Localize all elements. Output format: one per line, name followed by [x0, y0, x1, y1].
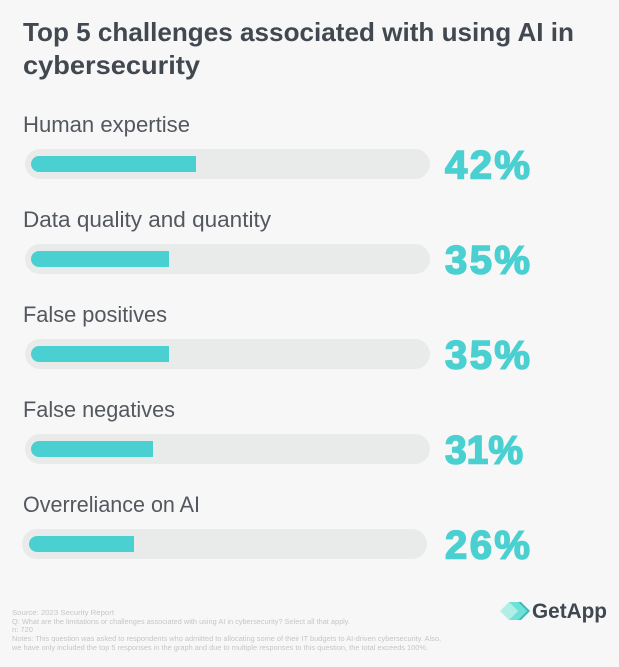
title: Top 5 challenges associated with using AI in [23, 17, 574, 47]
row: Data quality and quantity 35%: 35% [445, 238, 530, 282]
row: Overreliance on AI 26% [22, 492, 530, 568]
row: False negatives 31%: False negatives [23, 397, 175, 422]
row: False positives 35%: False positives [23, 302, 167, 327]
row: False positives 35%: 35% [445, 334, 530, 378]
footnotes: we have only included the top 5 responses in the graph and due to multiple responses to this question, the total exceeds 100%. [11, 645, 428, 652]
footnotes: Notes: This question was asked to respondents who admitted to allocating some of their IT budgets to AI-driven cybersecurity. Also, [12, 636, 441, 643]
row: Data quality and quantity 35%: Data quality and quantity [23, 207, 271, 232]
row: False negatives 31%: 31% [445, 428, 523, 472]
row: Overreliance on AI 26%: Overreliance on AI [23, 492, 200, 517]
row: False positives 35% [23, 302, 530, 378]
title: cybersecurity [23, 50, 201, 80]
title [23, 17, 574, 80]
icon: GetApp diamonds [500, 602, 530, 620]
logo: GetApp: GetApp [532, 600, 607, 623]
row: Data quality and quantity 35% [23, 207, 530, 282]
row: False negatives 31% [23, 397, 523, 472]
logo: GetApp [500, 600, 607, 623]
footnotes: Q: What are the limitations or challenges associated with using AI in cybersecurity? Select all that apply. [12, 619, 350, 626]
footnotes: n: 720 [12, 627, 33, 634]
row: Human expertise 42%: Human expertise [23, 112, 190, 137]
row: Overreliance on AI 26%: 26% [445, 524, 530, 568]
row: Human expertise 42% [23, 112, 530, 188]
row: Human expertise 42%: 42% [445, 144, 530, 188]
footnotes: Source: 2023 Security Report [12, 610, 114, 617]
footnotes [11, 610, 441, 652]
